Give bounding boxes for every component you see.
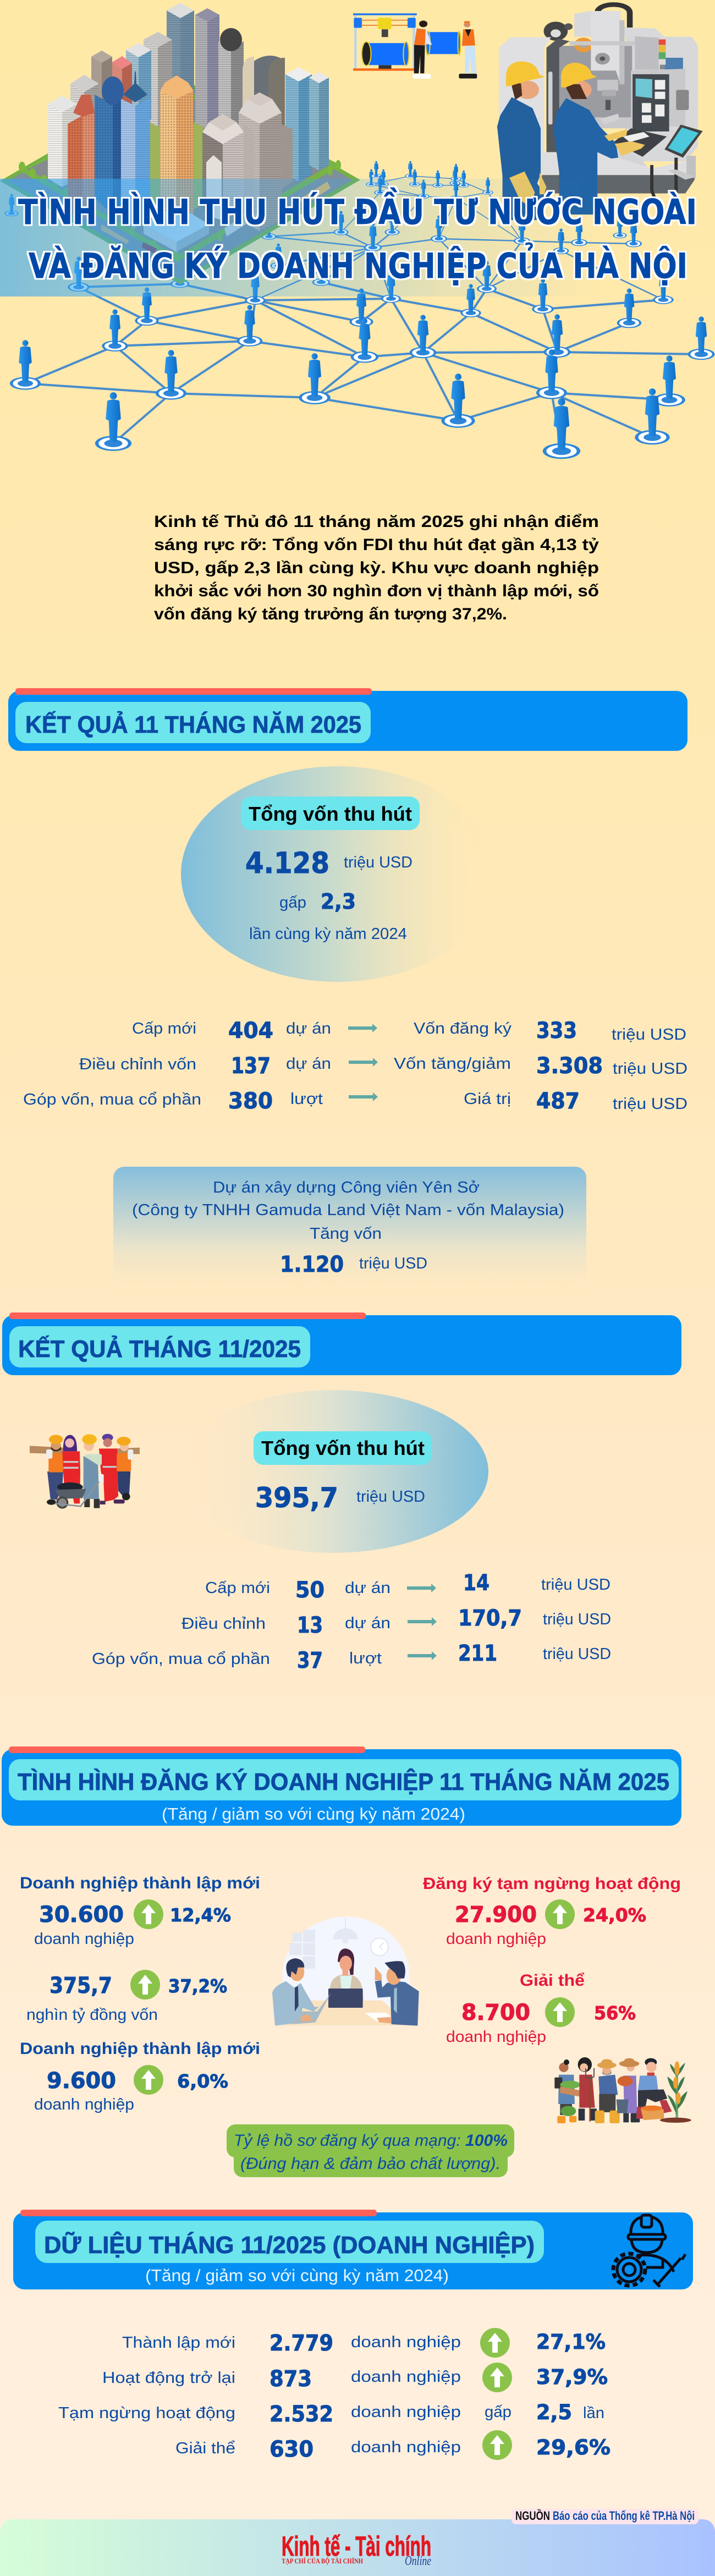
- stat: temporary suspension: [423, 1875, 681, 1948]
- intro paragraph: sáng rực rỡ: Tổng vốn FDI thu hút đạt gần 4,13 tỷ: [154, 536, 599, 554]
- section header: November results: KẾT QUẢ THÁNG 11/2025: [18, 1335, 301, 1363]
- label pill: Tổng vốn thu hút: [249, 803, 412, 825]
- table: November enterprise data: [58, 2328, 610, 2462]
- source note: NGUỒN: [515, 2509, 550, 2523]
- row: dissolved: Giải thể: [175, 2440, 235, 2457]
- row: dissolved: [175, 2430, 610, 2462]
- row: adjustment: Điều chỉnh: [182, 1615, 266, 1633]
- row: capital contribution: Góp vốn, mua cổ phần: [23, 1091, 201, 1108]
- icon: group of farmers: [554, 2057, 691, 2123]
- intro paragraph: USD, gấp 2,3 lần cùng kỳ. Khu vực doanh nghiệp: [154, 559, 599, 577]
- title: [18, 188, 697, 286]
- row: capital contribution: 380: [228, 1089, 273, 1114]
- row: dissolved: 630: [270, 2437, 314, 2462]
- stat: new enterprises: Doanh nghiệp thành lập mới: [20, 1874, 260, 1892]
- section header: November results: [2, 1312, 681, 1375]
- row: resumed operations: 37,9%: [536, 2365, 608, 2389]
- row: capital adjustment: Điều chỉnh vốn: [79, 1056, 196, 1073]
- row: newly established: doanh nghiệp: [351, 2333, 461, 2351]
- row: suspended: [58, 2401, 604, 2427]
- row: newly established: [122, 2328, 606, 2358]
- stat: new enterprises: [20, 1874, 260, 1948]
- label pill: [254, 1431, 432, 1465]
- stat: dissolved: doanh nghiệp: [446, 2028, 546, 2046]
- row: adjustment: dự án: [345, 1614, 391, 1632]
- section header: 11-month results: [8, 688, 688, 751]
- stat: dissolved: 8.700: [461, 2000, 530, 2025]
- row: new licences: 404: [228, 1018, 273, 1043]
- stat: temporary suspension: 24,0%: [583, 1904, 646, 1926]
- intro paragraph: Kinh tế Thủ đô 11 tháng năm 2025 ghi nhận điểm: [154, 513, 599, 531]
- main figure: triệu USD: [356, 1488, 425, 1506]
- row: resumed operations: Hoạt động trở lại: [102, 2369, 235, 2387]
- row: new licences: [132, 1018, 686, 1043]
- row: newly established: 2.779: [270, 2331, 333, 2356]
- row: new licences: dự án: [345, 1579, 391, 1597]
- section header: 11-month enterprise registration: TÌNH HÌNH ĐĂNG KÝ DOANH NGHIỆP 11 THÁNG NĂM 2025: [18, 1768, 669, 1795]
- stat: returning enterprises: [20, 2040, 260, 2113]
- row: suspended: 2,5: [536, 2401, 572, 2424]
- label pill: Tổng vốn thu hút: [261, 1437, 425, 1459]
- panel: Yen So park project: Dự án xây dựng Công viên Yên Sở: [213, 1179, 480, 1196]
- stat: temporary suspension: doanh nghiệp: [446, 1930, 546, 1948]
- hero illustration: isometric city towers: [0, 3, 360, 284]
- row: capital contribution: Góp vốn, mua cổ phần: [92, 1650, 270, 1668]
- source note: [512, 2509, 698, 2524]
- stat: registered capital: nghìn tỷ đồng vốn: [26, 2006, 158, 2024]
- row: dissolved: doanh nghiệp: [351, 2438, 461, 2456]
- stat: new enterprises: doanh nghiệp: [34, 1930, 134, 1948]
- stat: temporary suspension: 27.900: [455, 1902, 537, 1927]
- logo: Kinh te - Tai chinh: Kinh tế - Tài chính: [282, 2531, 431, 2562]
- multiple figure: gấp: [279, 894, 306, 911]
- row: capital adjustment: Vốn tăng/giảm: [394, 1055, 511, 1073]
- row: new licences: triệu USD: [541, 1576, 610, 1594]
- row: adjustment: 170,7: [458, 1606, 522, 1631]
- row: capital contribution: [23, 1089, 688, 1114]
- row: capital adjustment: [79, 1053, 688, 1079]
- table: November project breakdown: [92, 1570, 611, 1673]
- row: newly established: Thành lập mới: [122, 2334, 235, 2352]
- row: capital contribution: Giá trị: [464, 1090, 511, 1108]
- row: capital contribution: triệu USD: [543, 1645, 611, 1663]
- stat: registered capital: 375,7: [50, 1973, 112, 1998]
- callout: online registration rate: Tỷ lệ hồ sơ đăng ký qua mạng: 100%: [234, 2132, 508, 2150]
- section header: 11-month enterprise registration: (Tăng / giảm so với cùng kỳ năm 2024): [162, 1804, 465, 1823]
- row: adjustment: 13: [297, 1613, 323, 1638]
- callout: online registration rate: [227, 2124, 514, 2177]
- row: new licences: 14: [463, 1570, 490, 1596]
- row: capital contribution: triệu USD: [613, 1095, 688, 1113]
- stat: new enterprises: 30.600: [39, 1902, 124, 1927]
- hero illustration: people network: [4, 161, 714, 459]
- icon: group of construction workers: [30, 1434, 140, 1508]
- row: new licences: 333: [536, 1018, 577, 1043]
- row: capital adjustment: 137: [231, 1053, 271, 1079]
- stat: new enterprises: 12,4%: [170, 1904, 231, 1926]
- intro paragraph: khởi sắc với hơn 30 nghìn đơn vị thành lập mới, số: [154, 581, 599, 600]
- row: adjustment: triệu USD: [543, 1611, 611, 1628]
- footer band: [0, 2519, 715, 2576]
- section header: 11-month results: KẾT QUẢ 11 THÁNG NĂM 2025: [25, 711, 361, 738]
- row: new licences: Cấp mới: [205, 1579, 270, 1597]
- panel: Yen So park project: 1.120: [280, 1252, 344, 1277]
- row: new licences: triệu USD: [612, 1026, 686, 1043]
- panel: Yen So park project: triệu USD: [359, 1255, 427, 1272]
- title band: [0, 179, 605, 296]
- stat: registered capital: [26, 1970, 227, 2024]
- intro paragraph: vốn đăng ký tăng trưởng ấn tượng 37,2%.: [154, 605, 507, 623]
- intro paragraph: [154, 513, 599, 623]
- row: resumed operations: doanh nghiệp: [351, 2368, 461, 2386]
- row: new licences: Cấp mới: [132, 1020, 196, 1037]
- stat: returning enterprises: Doanh nghiệp thành lập mới: [20, 2040, 260, 2058]
- stat: dissolved: [446, 1971, 636, 2046]
- row: suspended: Tạm ngừng hoạt động: [58, 2404, 235, 2422]
- label pill: [241, 797, 420, 830]
- panel: total capital, November: [177, 1390, 488, 1553]
- row: capital contribution: lượt: [290, 1090, 323, 1108]
- multiple figure: [279, 889, 356, 914]
- row: dissolved: 29,6%: [536, 2436, 610, 2459]
- row: newly established: 27,1%: [536, 2330, 606, 2354]
- row: adjustment: [182, 1606, 611, 1638]
- stat: registered capital: 37,2%: [168, 1975, 227, 1997]
- row: new licences: [205, 1570, 610, 1603]
- panel: Yen So park project: [113, 1167, 586, 1299]
- main figure: triệu USD: [344, 854, 413, 871]
- row: new licences: Vốn đăng ký: [414, 1020, 512, 1037]
- row: suspended: 2.532: [270, 2402, 333, 2427]
- stat: returning enterprises: 6,0%: [177, 2070, 228, 2092]
- main figure: [255, 1482, 425, 1514]
- logo: Kinh te - Tai chinh: Online: [405, 2554, 431, 2568]
- row: capital contribution: 211: [458, 1641, 497, 1666]
- row: capital contribution: 487: [536, 1089, 580, 1114]
- row: capital contribution: [92, 1641, 611, 1673]
- hero illustration: 3D printer with two workers: [353, 13, 477, 79]
- panel: Yen So park project: (Công ty TNHH Gamuda Land Việt Nam - vốn Malaysia): [132, 1201, 564, 1219]
- hero illustration: CNC machine with two technicians: [497, 4, 703, 220]
- stat: returning enterprises: 9.600: [47, 2068, 116, 2094]
- stat: dissolved: Giải thể: [520, 1971, 585, 1990]
- row: resumed operations: 873: [270, 2366, 312, 2392]
- stat: returning enterprises: doanh nghiệp: [34, 2096, 134, 2113]
- logo: Kinh te - Tai chinh: [282, 2531, 431, 2568]
- section header: 11-month enterprise registration: [2, 1746, 681, 1826]
- row: suspended: lần: [583, 2404, 604, 2422]
- panel: total capital, 11 months: lần cùng kỳ năm 2024: [249, 925, 407, 943]
- row: capital adjustment: 3.308: [536, 1053, 603, 1079]
- row: suspended: doanh nghiệp: [351, 2403, 461, 2421]
- section header: November enterprise data: (Tăng / giảm so với cùng kỳ năm 2024): [145, 2266, 449, 2285]
- row: capital contribution: lượt: [349, 1650, 382, 1667]
- multiple figure: 2,3: [321, 889, 356, 914]
- main figure: 395,7: [255, 1482, 338, 1514]
- stat: temporary suspension: Đăng ký tạm ngừng hoạt động: [423, 1875, 681, 1893]
- main figure: [245, 847, 413, 880]
- row: suspended: gấp: [485, 2403, 512, 2421]
- logo: Kinh te - Tai chinh: TẠP CHÍ CỦA BỘ TÀI CHÍNH: [282, 2557, 363, 2565]
- panel: Yen So park project: Tăng vốn: [310, 1225, 382, 1243]
- row: resumed operations: [102, 2363, 608, 2392]
- callout: online registration rate: (Đúng hạn & đảm bảo chất lượng).: [240, 2155, 501, 2173]
- icon: engineer with gear: [613, 2215, 685, 2287]
- row: capital adjustment: dự án: [286, 1055, 331, 1073]
- row: new licences: dự án: [286, 1020, 331, 1037]
- stat: dissolved: 56%: [594, 2002, 636, 2024]
- main figure: 4.128: [245, 847, 329, 880]
- section header: November enterprise data: [13, 2210, 693, 2289]
- row: capital contribution: 37: [297, 1648, 323, 1673]
- table: 11-month project breakdown: [23, 1018, 688, 1114]
- icon: business meeting: [272, 1916, 419, 2026]
- row: capital adjustment: triệu USD: [613, 1060, 688, 1078]
- row: new licences: 50: [295, 1578, 324, 1603]
- section header: November enterprise data: DỮ LIỆU THÁNG 11/2025 (DOANH NGHIỆP): [44, 2231, 535, 2259]
- panel: total capital, 11 months: [181, 766, 494, 982]
